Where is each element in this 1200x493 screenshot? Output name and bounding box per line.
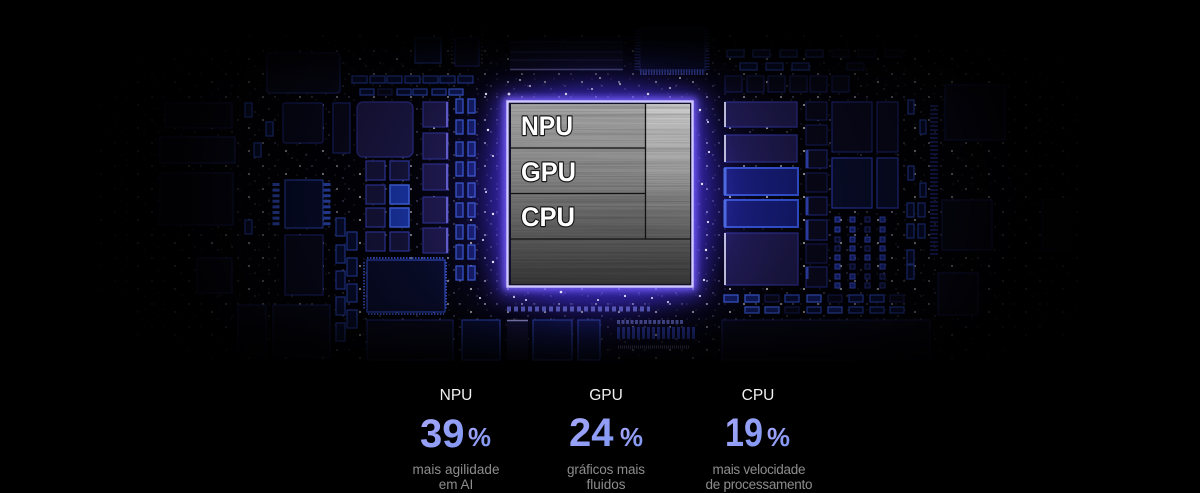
stat: CPU: %: [767, 422, 790, 452]
stat: NPU: 39: [420, 412, 464, 456]
chip dividers: [511, 104, 690, 239]
stat: GPU: %: [620, 422, 643, 452]
small square grid right: [835, 217, 885, 288]
chip: [508, 102, 692, 286]
connector rows right: [724, 50, 934, 313]
stat: NPU: %: [468, 422, 491, 452]
stat: NPU: [412, 387, 500, 492]
top components: [452, 27, 707, 72]
chip label: CPU: CPU: [521, 202, 575, 232]
stat: GPU: [567, 387, 645, 492]
stat: NPU: NPU: [440, 387, 472, 404]
purple glow around chip: [400, 0, 800, 390]
stat: GPU: gráficos mais: [567, 462, 645, 477]
stat: CPU: 19: [725, 411, 763, 455]
glow dots near chip: [479, 77, 710, 303]
stat: GPU: 24: [569, 411, 614, 455]
stat: GPU: GPU: [589, 387, 623, 404]
connector columns left: [245, 76, 475, 341]
chip border: [508, 102, 692, 286]
stat: CPU: mais velocidade: [712, 462, 806, 477]
stat: CPU: de processamento: [706, 477, 812, 492]
stat: CPU: CPU: [742, 387, 774, 404]
stat: GPU: fluidos: [586, 477, 626, 492]
stat: NPU: mais agilidade: [412, 462, 500, 477]
left components: [160, 38, 500, 360]
chip label: GPU: GPU: [521, 157, 576, 187]
stat: NPU: em AI: [439, 477, 473, 492]
chip label: NPU: NPU: [521, 111, 573, 141]
right components: [722, 76, 1072, 360]
bottom components: [507, 309, 697, 360]
stat: CPU: [706, 387, 812, 492]
chip metal surface: [511, 104, 690, 284]
